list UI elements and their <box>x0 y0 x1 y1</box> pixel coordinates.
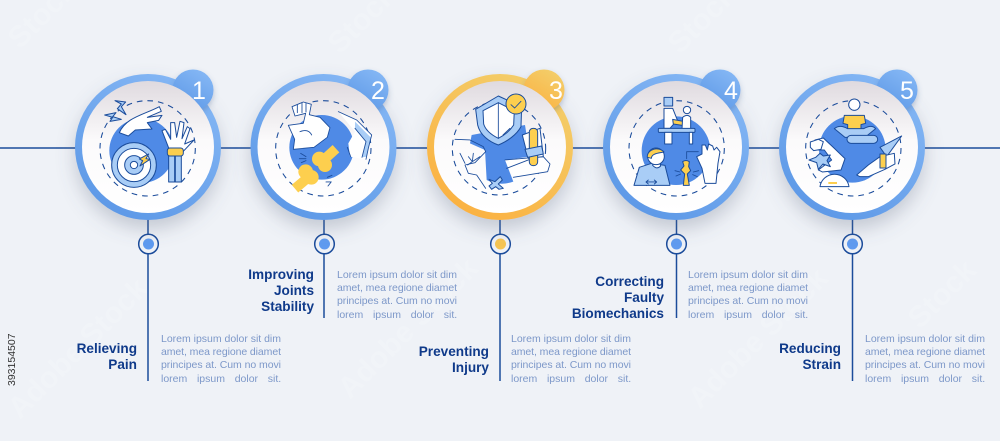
description 4: amet, mea regione diamet <box>688 282 808 294</box>
icon: pain relief <box>100 101 195 196</box>
description 4: principes at. Cum no movi <box>688 295 808 307</box>
description 4: Lorem ipsum dolor sit dim <box>688 269 808 281</box>
watermark: Stock <box>902 254 983 335</box>
description 5: amet, mea regione diamet <box>865 346 985 358</box>
number 2: 2 <box>371 77 385 105</box>
circle 2 <box>250 70 396 220</box>
connector 2 <box>315 215 334 318</box>
description 1: amet, mea regione diamet <box>161 346 281 358</box>
circle 4 <box>603 70 749 220</box>
number 5: 5 <box>900 77 914 105</box>
title 3: Injury <box>452 360 489 375</box>
description 1: principes at. Cum no movi <box>161 359 281 371</box>
description 1 <box>161 333 281 385</box>
step 5: Reducing Strain <box>779 70 985 385</box>
title 1: Relieving <box>77 341 137 356</box>
number 1: 1 <box>192 77 206 105</box>
title 4: Biomechanics <box>572 306 664 321</box>
description 2: lorem ipsum dolor sit. <box>337 309 457 321</box>
connector 1 <box>139 215 158 381</box>
watermark: Adobe Stock <box>682 262 835 415</box>
watermark: Adobe Stock <box>2 272 155 425</box>
title 4: Faulty <box>624 290 664 305</box>
step 4: Correcting Faulty Biomechanics <box>572 70 808 321</box>
connector 3 <box>491 215 510 381</box>
description 3: lorem ipsum dolor sit. <box>511 373 631 385</box>
step 1: Relieving Pain <box>75 70 281 385</box>
title 5: Reducing <box>779 341 841 356</box>
number 4: 4 <box>724 77 738 105</box>
timeline axis <box>0 147 1000 149</box>
description 3: amet, mea regione diamet <box>511 346 631 358</box>
description 1: Lorem ipsum dolor sit dim <box>161 333 281 345</box>
icon: joints stability <box>276 101 372 196</box>
title 3: Preventing <box>419 344 489 359</box>
title 2: Stability <box>261 299 314 314</box>
description 3: principes at. Cum no movi <box>511 359 631 371</box>
icon: preventing injury <box>452 94 550 195</box>
description 1: lorem ipsum dolor sit. <box>161 373 281 385</box>
circle 3 <box>427 70 573 220</box>
title 5: Strain <box>802 357 841 372</box>
description 2 <box>337 269 457 321</box>
connector 5 <box>843 215 862 381</box>
circle 1 <box>75 70 221 220</box>
title 2: Improving <box>248 267 314 282</box>
number 3: 3 <box>549 77 563 105</box>
description 3 <box>511 333 631 385</box>
description 5 <box>865 333 985 385</box>
description 2: Lorem ipsum dolor sit dim <box>337 269 457 281</box>
step 3: Preventing Injury <box>419 70 631 385</box>
connector 4 <box>667 215 686 318</box>
description 4 <box>688 269 808 321</box>
description 4: lorem ipsum dolor sit. <box>688 309 808 321</box>
description 5: principes at. Cum no movi <box>865 359 985 371</box>
icon: correcting biomechanics <box>629 97 724 196</box>
step 2: Improving Joints Stability <box>248 70 457 321</box>
image id: 393154507 <box>6 333 18 386</box>
icon: reducing strain <box>806 99 902 196</box>
description 3: Lorem ipsum dolor sit dim <box>511 333 631 345</box>
description 2: principes at. Cum no movi <box>337 295 457 307</box>
title 4: Correcting <box>595 274 664 289</box>
description 5: lorem ipsum dolor sit. <box>865 373 985 385</box>
watermark: Adobe Stock <box>332 252 485 405</box>
description 2: amet, mea regione diamet <box>337 282 457 294</box>
description 5: Lorem ipsum dolor sit dim <box>865 333 985 345</box>
title 1: Pain <box>108 357 137 372</box>
circle 5 <box>779 70 925 220</box>
title 2: Joints <box>274 283 314 298</box>
